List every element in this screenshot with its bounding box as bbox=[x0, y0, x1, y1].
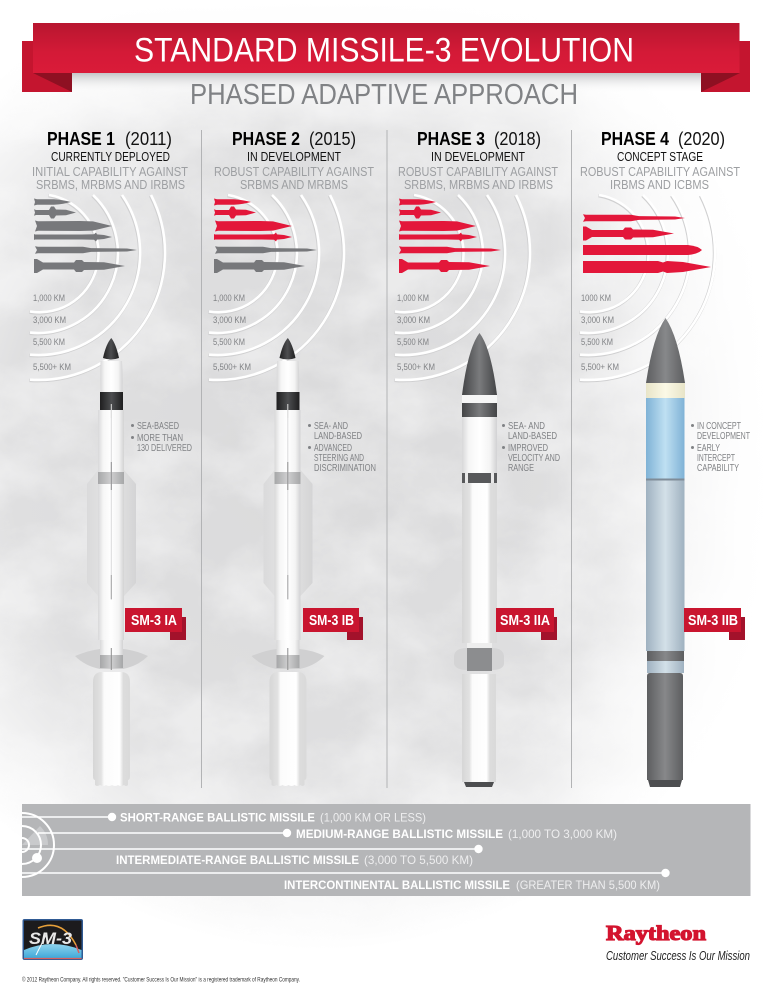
phase 2 header: SRBMS AND MRBMS bbox=[240, 177, 348, 192]
phase 4 range labels: 3,000 KM bbox=[581, 315, 614, 325]
phase 4 bullet notes: INTERCEPT bbox=[697, 453, 735, 464]
phase 1 range labels: 5,500 KM bbox=[33, 337, 65, 347]
phase 2 bullet notes: LAND-BASED bbox=[314, 431, 362, 442]
phase 4 range arcs bbox=[580, 195, 715, 381]
tag: SM-3 IA bbox=[125, 608, 186, 640]
tag: SM-3 IIA: SM-3 IIA bbox=[500, 612, 550, 629]
tag: SM-3 IA: SM-3 IA bbox=[131, 612, 177, 629]
phase 4 header: ROBUST CAPABILITY AGAINST bbox=[580, 164, 740, 179]
phase 3 header: SRBMS, MRBMS AND IRBMS bbox=[404, 177, 553, 192]
phase 1 header: CURRENTLY DEPLOYED bbox=[51, 149, 170, 164]
phase 3 header: IN DEVELOPMENT bbox=[431, 149, 525, 164]
logo: Raytheon: Raytheon bbox=[606, 921, 706, 945]
legend: intercontinental bbox=[284, 878, 660, 892]
phase 3 bullet notes: VELOCITY AND bbox=[508, 453, 560, 464]
phase 3 header: PHASE 3 bbox=[417, 129, 485, 149]
legend: medium-range bbox=[296, 827, 617, 841]
legend: short-range bbox=[120, 810, 426, 824]
title text: STANDARD MISSILE-3 EVOLUTION bbox=[134, 32, 634, 70]
phase 1 range labels: 5,500+ KM bbox=[33, 362, 71, 372]
phase 2 header bbox=[214, 129, 374, 192]
phase 3 bullet notes: SEA- AND bbox=[508, 421, 545, 432]
tag: SM-3 IB: SM-3 IB bbox=[309, 612, 354, 629]
tag: SM-3 IIA bbox=[496, 608, 557, 640]
phase 4 bullet notes: IN CONCEPT bbox=[697, 421, 741, 432]
phase 4 range labels bbox=[581, 293, 619, 372]
phase 3 range labels bbox=[397, 293, 435, 372]
legend: intermediate-range: (3,000 TO 5,500 KM) bbox=[364, 853, 473, 867]
phase 1 bullet notes: SEA-BASED bbox=[137, 421, 179, 432]
phase 3 bullet notes bbox=[502, 421, 560, 474]
phase 2 range labels: 5,500+ KM bbox=[213, 362, 251, 372]
phase 2 threat silhouettes bbox=[214, 198, 317, 273]
phase 2 range arcs bbox=[208, 195, 344, 381]
phase 3 range labels: 3,000 KM bbox=[397, 315, 430, 325]
phase 2 range labels: 5,500 KM bbox=[213, 337, 245, 347]
legend: intercontinental: INTERCONTINENTAL BALLISTIC MISSILE bbox=[284, 878, 510, 892]
phase 4 header bbox=[580, 129, 740, 192]
phase 1 range labels: 3,000 KM bbox=[33, 315, 66, 325]
phase 3 header: (2018) bbox=[494, 129, 541, 149]
phase 1 range labels bbox=[33, 293, 71, 372]
phase 2 bullet notes: SEA- AND bbox=[314, 421, 348, 432]
phase 3 threat silhouettes bbox=[399, 198, 501, 273]
phase 3 bullet notes: RANGE bbox=[508, 463, 534, 474]
missile: SM-3 IB bbox=[252, 338, 324, 786]
title ribbon bbox=[22, 23, 750, 93]
phase 2 bullet notes: STEERING AND bbox=[314, 453, 364, 464]
phase 1 range labels: 1,000 KM bbox=[33, 293, 65, 303]
phase 1 header: INITIAL CAPABILITY AGAINST bbox=[32, 164, 188, 179]
phase 2 bullet notes: ADVANCED bbox=[314, 443, 352, 454]
missile: SM-3 IA bbox=[75, 338, 148, 786]
leader lines bbox=[22, 813, 670, 877]
legend: intermediate-range: INTERMEDIATE-RANGE BALLISTIC MISSILE bbox=[116, 853, 359, 867]
copyright: © 2012 Raytheon Company. All rights reserved. "Customer Success Is Our Mission" is a registered trademark of Raytheon Company. bbox=[22, 976, 300, 984]
phase 3 bullet notes: IMPROVED bbox=[508, 443, 548, 454]
phase 2 range labels: 3,000 KM bbox=[213, 315, 246, 325]
phase 2 range labels: 1,000 KM bbox=[213, 293, 245, 303]
missile: SM-3 IIB bbox=[646, 318, 685, 787]
phase 1 bullet notes bbox=[131, 421, 192, 454]
phase 4 bullet notes: CAPABILITY bbox=[697, 463, 739, 474]
tag: SM-3 IIB: SM-3 IIB bbox=[688, 612, 738, 629]
icon: radar target bbox=[22, 813, 54, 877]
legend: short-range: SHORT-RANGE BALLISTIC MISSILE bbox=[120, 810, 315, 824]
phase 3 range labels: 5,500+ KM bbox=[397, 362, 435, 372]
phase 1 range arcs bbox=[30, 195, 165, 381]
subtitle: PHASED ADAPTIVE APPROACH bbox=[190, 79, 578, 111]
column dividers bbox=[202, 130, 572, 788]
phase 3 range arcs bbox=[394, 195, 530, 381]
range legend panel bbox=[22, 804, 750, 896]
phase 4 threat silhouettes bbox=[583, 214, 711, 273]
tag: SM-3 IIB bbox=[684, 608, 745, 640]
phase 1 header bbox=[32, 129, 188, 192]
phase 3 header: ROBUST CAPABILITY AGAINST bbox=[398, 164, 558, 179]
phase 2 header: PHASE 2 bbox=[232, 129, 300, 149]
phase 1 header: (2011) bbox=[125, 129, 172, 149]
phase 3 range labels: 1,000 KM bbox=[397, 293, 429, 303]
logo: SM-3 badge: SM-3 bbox=[29, 929, 73, 948]
legend: short-range: (1,000 KM OR LESS) bbox=[320, 810, 426, 824]
phase 1 threat silhouettes bbox=[34, 198, 137, 273]
phase 2 bullet notes bbox=[308, 421, 376, 474]
phase 2 header: (2015) bbox=[309, 129, 356, 149]
phase 4 header: IRBMS AND ICBMS bbox=[610, 177, 709, 192]
phase 4 range labels: 1000 KM bbox=[581, 293, 611, 303]
phase 3 header bbox=[398, 129, 558, 192]
missile: SM-3 IIA bbox=[454, 333, 504, 787]
phase 3 range labels: 5,500 KM bbox=[397, 337, 429, 347]
phase 2 bullet notes: DISCRIMINATION bbox=[314, 463, 376, 474]
logo: SM-3 badge bbox=[22, 919, 83, 960]
legend: medium-range: (1,000 TO 3,000 KM) bbox=[508, 827, 617, 841]
phase 4 bullet notes bbox=[691, 421, 750, 474]
phase 1 bullet notes: MORE THAN bbox=[137, 433, 183, 444]
legend: medium-range: MEDIUM-RANGE BALLISTIC MISSILE bbox=[296, 827, 503, 841]
phase 4 header: CONCEPT STAGE bbox=[617, 149, 703, 164]
phase 1 header: SRBMS, MRBMS AND IRBMS bbox=[36, 177, 185, 192]
phase 1 bullet notes: 130 DELIVERED bbox=[137, 443, 192, 454]
phase 4 bullet notes: EARLY bbox=[697, 443, 720, 454]
tag: SM-3 IB bbox=[303, 608, 363, 640]
phase 4 bullet notes: DEVELOPMENT bbox=[697, 431, 750, 442]
phase 1 header: PHASE 1 bbox=[47, 129, 115, 149]
phase 2 header: ROBUST CAPABILITY AGAINST bbox=[214, 164, 374, 179]
phase 2 range labels bbox=[213, 293, 251, 372]
phase 4 header: (2020) bbox=[678, 129, 725, 149]
phase 4 range labels: 5,500 KM bbox=[581, 337, 613, 347]
legend: intercontinental: (GREATER THAN 5,500 KM) bbox=[516, 878, 660, 892]
phase 4 header: PHASE 4 bbox=[601, 129, 669, 149]
phase 2 header: IN DEVELOPMENT bbox=[247, 149, 341, 164]
phase 3 bullet notes: LAND-BASED bbox=[508, 431, 557, 442]
phase 4 range labels: 5,500+ KM bbox=[581, 362, 619, 372]
